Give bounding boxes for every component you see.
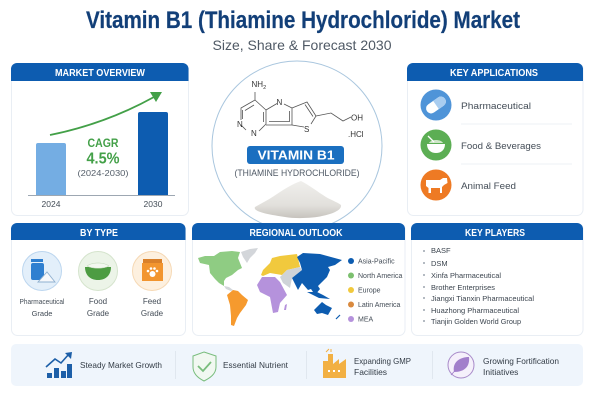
chemical name: (THIAMINE HYDROCHLORIDE) — [234, 168, 360, 179]
structure labels: .HCl — [348, 130, 364, 139]
heading — [407, 63, 583, 81]
label: Food — [89, 297, 107, 306]
structure labels: N — [251, 129, 257, 138]
players list: Jiangxi Tianxin Pharmaceutical — [431, 294, 534, 303]
CAGR: (2024-2030) — [78, 168, 129, 178]
structure labels — [237, 80, 364, 139]
icon: leaf — [448, 352, 474, 378]
label: Grade — [32, 309, 52, 318]
legend — [348, 258, 402, 324]
players list: Huazhong Pharmaceutical — [431, 306, 519, 315]
players list — [423, 246, 534, 326]
bar 2024 — [36, 143, 66, 195]
heading — [192, 223, 405, 240]
icon: factory — [323, 349, 346, 378]
label: Feed — [143, 297, 161, 306]
panel: key applications — [407, 63, 583, 216]
icon: pill — [420, 90, 452, 120]
icon: feed grade — [132, 252, 172, 290]
text: Pharmaceutical — [461, 101, 531, 112]
icon: shield — [193, 352, 216, 381]
text: Essential Nutrient — [223, 360, 289, 370]
icon: cow — [420, 170, 452, 200]
structure labels: N — [276, 98, 282, 107]
text: Facilities — [354, 367, 387, 377]
structure labels: NH — [252, 80, 263, 89]
text: Growing Fortification — [483, 356, 559, 366]
icon: bowl — [420, 130, 452, 160]
legend: Europe — [358, 288, 381, 294]
growth arrow — [50, 92, 162, 135]
central circle: vitamin B1 — [212, 61, 382, 231]
subtitle: Size, Share & Forecast 2030 — [212, 37, 392, 53]
CAGR — [78, 136, 129, 178]
text: Expanding GMP — [354, 356, 411, 366]
CAGR: 4.5% — [86, 150, 120, 168]
heading — [11, 223, 186, 240]
heading — [11, 63, 188, 81]
vitamin B1 badge — [247, 146, 344, 164]
legend: North America — [358, 273, 402, 280]
bar 2030 — [138, 112, 168, 195]
axis labels: 2024 — [42, 199, 61, 209]
text: Steady Market Growth — [80, 360, 162, 370]
panel: by type — [11, 223, 186, 336]
players list: Brother Enterprises — [431, 283, 495, 292]
text: Initiatives — [483, 367, 518, 377]
players list: BASF — [431, 246, 451, 255]
axis labels — [42, 199, 163, 209]
panel: key players — [411, 223, 583, 336]
powder pile — [255, 181, 341, 218]
label: Grade — [87, 309, 110, 318]
world map — [198, 248, 342, 326]
heading: KEY APPLICATIONS — [450, 68, 538, 79]
structure labels: N — [237, 120, 243, 129]
axis labels: 2030 — [144, 199, 163, 209]
structure labels: 2 — [263, 85, 266, 91]
legend: MEA — [358, 316, 374, 324]
legend: Latin America — [358, 302, 401, 309]
heading: BY TYPE — [80, 228, 118, 239]
icon: pharmaceutical grade — [22, 252, 62, 290]
players list: Tianjin Golden World Group — [431, 317, 521, 326]
central circle: vitamin B1: VITAMIN B1 — [258, 148, 334, 162]
panel: market overview — [11, 63, 188, 216]
title: Vitamin B1 (Thiamine Hydrochloride) Market — [86, 7, 520, 34]
heading: REGIONAL OUTLOOK — [250, 228, 343, 239]
chemical structure — [241, 92, 351, 131]
structure labels: OH — [351, 114, 363, 122]
players list: Xinfa Pharmaceutical — [431, 271, 501, 280]
icon: food grade — [78, 252, 118, 290]
heading: MARKET OVERVIEW — [55, 68, 145, 79]
players list: DSM — [431, 259, 448, 268]
panel: highlights strip — [11, 344, 583, 386]
panel: regional outlook — [192, 223, 405, 336]
heading: KEY PLAYERS — [465, 228, 525, 239]
heading — [411, 223, 583, 240]
CAGR: CAGR — [88, 136, 119, 150]
label: Pharmaceutical — [20, 297, 65, 306]
text: Animal Feed — [461, 181, 516, 192]
structure labels: S — [304, 125, 309, 134]
icon: market growth — [46, 352, 72, 378]
legend: Asia-Pacific — [358, 258, 395, 266]
text: Food & Beverages — [461, 141, 541, 152]
label: Grade — [141, 309, 164, 318]
